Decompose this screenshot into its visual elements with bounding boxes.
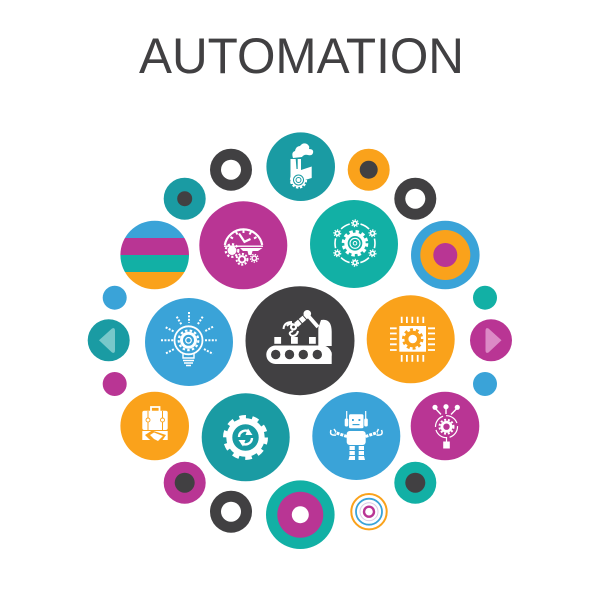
decorative target: bottom teal [266, 480, 335, 549]
panel: partnership [120, 392, 189, 460]
icon: robot with wrenches [331, 411, 382, 460]
icon: central gear with satellite gears [334, 220, 376, 266]
decorative target: right blue [411, 221, 480, 289]
panel: gear network [310, 200, 398, 288]
icon: microchip with gear [390, 317, 435, 362]
panel: clock gears [199, 201, 287, 289]
decorative ring: bottom dark [210, 491, 252, 533]
panel: chip [367, 295, 455, 383]
icon: gear with refresh arrows [225, 417, 266, 458]
panel: gear with nodes [411, 392, 479, 460]
small dot: lower right blue [473, 372, 497, 396]
title: AUTOMATION [139, 28, 464, 84]
panel: conveyor robot arm (center) [246, 286, 354, 395]
small dot: lower left magenta [103, 372, 127, 396]
small dot: upper left blue [103, 286, 127, 310]
icon: bulb with gear and rays [161, 312, 217, 366]
icon: gear with circuit nodes [432, 404, 460, 448]
right arrow button [470, 319, 512, 361]
decorative target: small concentric rings [351, 494, 387, 529]
decorative dot: bottom right teal [394, 462, 436, 504]
decorative striped circle [120, 220, 190, 290]
panel: process gear [202, 393, 290, 481]
decorative dot: top left teal [164, 178, 206, 220]
panel: factory [266, 132, 335, 201]
panel: robot [312, 392, 400, 480]
decorative dot: top orange [348, 149, 390, 191]
small dot: upper right teal [473, 286, 497, 310]
icon: briefcase with handshake [142, 407, 168, 444]
decorative ring: top right dark [394, 178, 436, 220]
decorative ring: top left dark [210, 149, 252, 191]
left arrow button [88, 319, 130, 361]
panel: light bulb idea [145, 298, 233, 386]
decorative ring: bottom left magenta [164, 462, 206, 504]
icon: gauge clock with gears [224, 229, 263, 265]
icon: conveyor belt with robotic arm [266, 310, 332, 364]
icon: factory with cloud and gear [290, 143, 313, 188]
